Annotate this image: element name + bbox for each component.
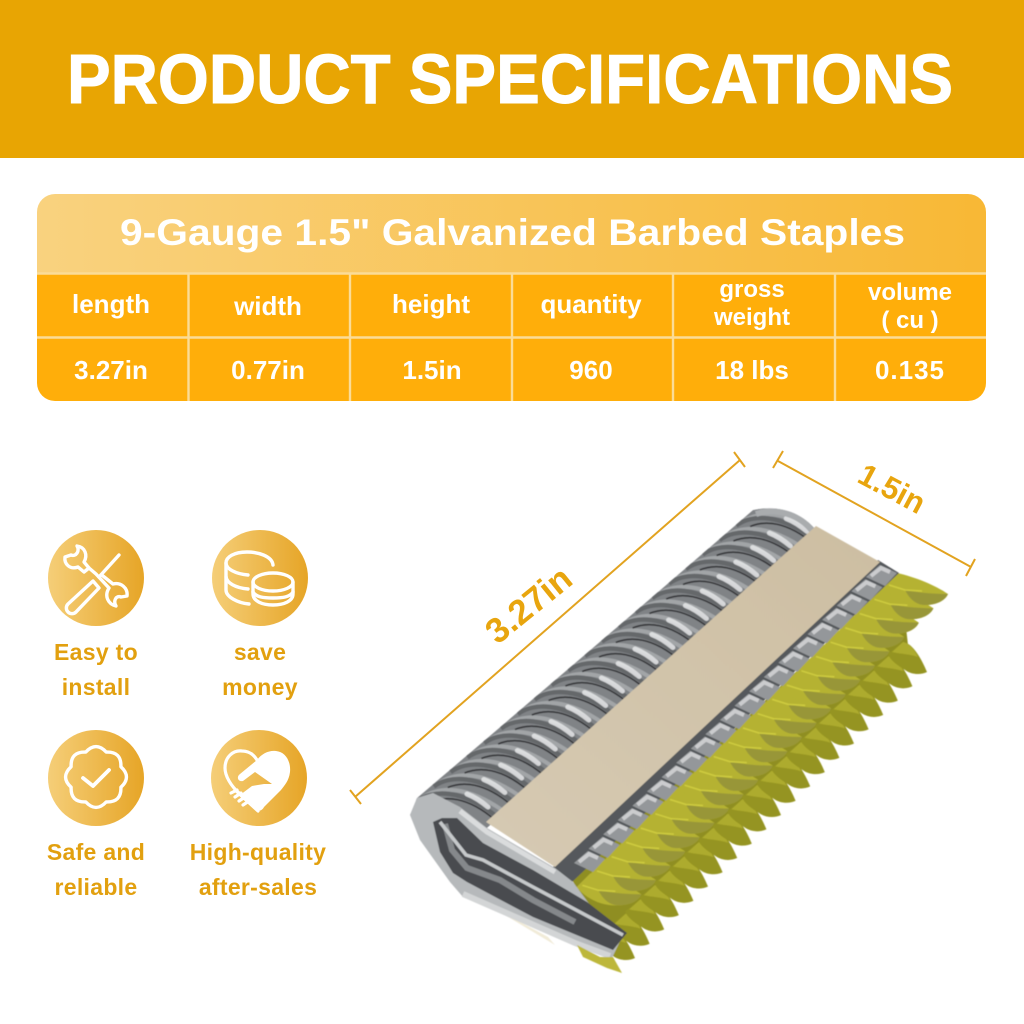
yellow backing mass bbox=[572, 575, 908, 945]
column headers: quantity bbox=[540, 289, 642, 319]
column headers: length bbox=[72, 289, 150, 319]
column values bbox=[74, 355, 945, 385]
column headers: width bbox=[233, 291, 302, 321]
label: Safe and bbox=[47, 839, 145, 865]
label: save bbox=[234, 639, 286, 665]
feature: safe and reliable bbox=[47, 730, 145, 900]
column values: 0.135 bbox=[875, 355, 945, 385]
column headers: volume bbox=[868, 279, 952, 306]
product photo: collated barbed staples bbox=[410, 508, 948, 973]
table heading: 9-Gauge 1.5" Galvanized Barbed Staples bbox=[120, 212, 905, 253]
column values: 0.77in bbox=[231, 355, 305, 385]
paper tape bbox=[486, 526, 880, 867]
label: High-quality bbox=[190, 839, 326, 865]
front end of staple bbox=[410, 793, 627, 973]
silver strip under tape bbox=[553, 560, 899, 882]
column values: 960 bbox=[569, 355, 613, 385]
icon: wrench and screwdriver bbox=[48, 530, 144, 626]
header banner bbox=[0, 0, 1024, 158]
upper row of yellow barbs bbox=[576, 573, 948, 905]
specification table bbox=[37, 194, 986, 401]
icon: coins bbox=[212, 530, 308, 626]
column values: 1.5in bbox=[402, 355, 462, 385]
label line 2: reliable bbox=[55, 874, 137, 900]
height label: 1.5in bbox=[853, 457, 931, 521]
title: PRODUCT SPECIFICATIONS bbox=[67, 40, 953, 118]
column headers: height bbox=[392, 289, 470, 319]
feature: high-quality after-sales bbox=[190, 730, 326, 900]
label line 2: money bbox=[222, 674, 298, 700]
lower row of yellow tips bbox=[596, 642, 927, 960]
label: Easy to bbox=[54, 639, 138, 665]
column headers: ( cu ) bbox=[881, 307, 939, 334]
dimension: height 1.5in bbox=[773, 451, 975, 576]
feature: easy to install bbox=[48, 530, 144, 700]
column values: 3.27in bbox=[74, 355, 148, 385]
silver coil body bbox=[410, 508, 821, 828]
feature: save money bbox=[212, 530, 308, 700]
label line 2: after-sales bbox=[199, 874, 317, 900]
column headers: weight bbox=[713, 304, 790, 331]
label line 2: install bbox=[62, 674, 130, 700]
icon: handshake heart bbox=[211, 730, 307, 826]
column values: 18 lbs bbox=[715, 355, 789, 385]
yellow point of front staple bbox=[577, 945, 622, 973]
dimension: length 3.27in bbox=[350, 452, 745, 804]
column headers: gross bbox=[719, 276, 785, 303]
icon: badge with check bbox=[48, 730, 144, 826]
length label: 3.27in bbox=[478, 559, 580, 651]
column headers bbox=[72, 276, 952, 334]
